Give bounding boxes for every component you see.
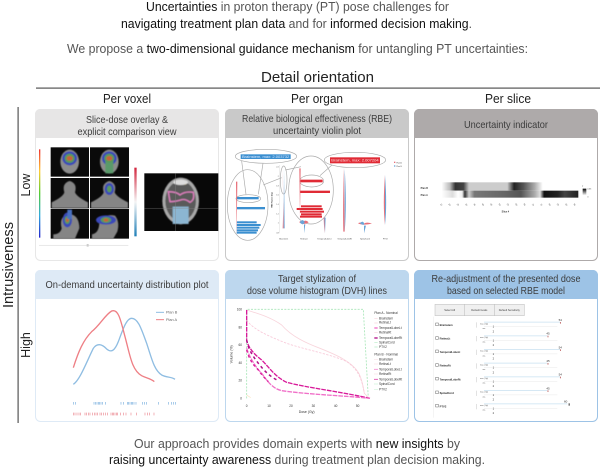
organ sliders: TemporalLobeRt bbox=[440, 377, 461, 381]
slice heatmap: 35 bbox=[472, 203, 476, 207]
row heading: High: High bbox=[19, 332, 33, 358]
comparison CT view bbox=[134, 168, 218, 236]
slice heatmap: Slice # bbox=[502, 212, 510, 214]
organ sliders: RetinaLt bbox=[440, 337, 450, 341]
DVH chart: 40 bbox=[334, 404, 338, 408]
DVH chart bbox=[230, 307, 402, 414]
organ sliders: 2 bbox=[493, 370, 495, 374]
organ sliders: unc. bbox=[482, 410, 486, 412]
control buttons bbox=[433, 304, 524, 418]
DVH legend: PTV2 bbox=[379, 345, 387, 349]
DVH chart: 0 bbox=[246, 404, 248, 408]
DVH legend: RetinaRt bbox=[379, 331, 391, 335]
CT slice grid with dose overlay bbox=[39, 147, 129, 247]
organ sliders: 2 bbox=[493, 329, 495, 333]
organ sliders: 1 bbox=[493, 366, 495, 370]
slice heatmap: Plan B bbox=[421, 188, 428, 190]
organ sliders: TemporalLobeLt bbox=[440, 350, 460, 354]
column heading: Per slice: Per slice bbox=[485, 92, 531, 106]
organ sliders: 45 bbox=[546, 386, 550, 390]
panel: DVH line stylization bbox=[225, 270, 409, 422]
slice heatmap: 85 bbox=[556, 203, 559, 207]
DVH chart: 30 bbox=[312, 404, 315, 408]
violin chart with callouts: Brainstem, max: 2.007204 bbox=[331, 159, 379, 163]
conclusion text bbox=[109, 437, 485, 467]
DVH chart: 100 bbox=[237, 307, 242, 311]
DVH chart: 50 bbox=[356, 404, 360, 408]
panel: on-demand distribution plot: On-demand uncertainty distribution plot bbox=[46, 279, 209, 291]
organ sliders: 1 bbox=[493, 393, 495, 397]
organ sliders: unc. bbox=[482, 396, 486, 398]
organ sliders: 54 bbox=[559, 345, 562, 349]
violin chart with callouts: 1.2 bbox=[276, 213, 279, 215]
violin chart with callouts: 1 bbox=[278, 223, 279, 225]
organ sliders: 54 bbox=[559, 318, 562, 322]
density curves and rug marks bbox=[73, 311, 178, 415]
DVH chart: 40 bbox=[238, 361, 242, 365]
panel: DVH line stylization: dose volume histogram (DVH) lines bbox=[247, 285, 387, 297]
organ sliders: 1 bbox=[493, 352, 495, 356]
DVH chart: 0 bbox=[240, 396, 242, 400]
DVH legend: SpinalCord bbox=[379, 340, 395, 344]
organ sliders: 2 bbox=[493, 343, 495, 347]
panel: on-demand distribution plot bbox=[35, 270, 219, 422]
column heading: Per organ: Per organ bbox=[291, 92, 343, 106]
slice heatmap: 15 bbox=[439, 203, 442, 207]
DVH chart: 10 bbox=[267, 404, 271, 408]
slice heatmap: 0 bbox=[587, 196, 589, 198]
organ sliders: RetinaRt bbox=[440, 364, 451, 368]
control buttons: Default Sensitivity bbox=[499, 308, 521, 312]
DVH legend: Brainstem bbox=[379, 358, 394, 362]
proposal text: We propose a two-dimensional guidance mechanism for untangling PT uncertainties: bbox=[67, 42, 528, 56]
DVH chart: 60 bbox=[238, 343, 242, 347]
organ sliders: unc. bbox=[482, 369, 486, 371]
panel: RBE violin plot bbox=[225, 109, 409, 260]
slice heatmap: Plan A bbox=[421, 194, 428, 197]
violin chart with callouts: 0.8 bbox=[276, 232, 279, 234]
violin chart with callouts: TemporalLobeRt bbox=[337, 237, 352, 240]
DVH chart: Volume (%) bbox=[230, 345, 234, 363]
DVH legend: Plan A - Nominal bbox=[374, 311, 398, 315]
organ sliders: SpinalCord bbox=[440, 391, 454, 395]
DVH legend: PTV2 bbox=[379, 387, 387, 391]
slice heatmap: 55 bbox=[506, 203, 509, 207]
violin chart with callouts: 1.4 bbox=[276, 204, 279, 206]
control buttons: Default Goals bbox=[471, 308, 488, 312]
violin chart with callouts: 1.6 bbox=[276, 195, 279, 197]
panel: RBE violin plot: uncertainty violin plot bbox=[273, 125, 361, 137]
violin chart with callouts: 2.2 bbox=[276, 167, 279, 169]
slice heatmap: 0.33 bbox=[587, 189, 592, 191]
conclusion text: raising uncertainty awareness during treatment plan decision making. bbox=[109, 453, 485, 467]
slice heatmap: 30 bbox=[464, 203, 467, 207]
violin chart with callouts: Brainstem bbox=[279, 237, 288, 240]
organ sliders: Brainstem bbox=[440, 323, 453, 327]
panel: slice-dose overlay: explicit comparison view bbox=[78, 126, 177, 138]
organ sliders: 60 bbox=[564, 400, 568, 404]
density curves and rug marks: Plan A bbox=[166, 318, 178, 322]
organ sliders: unc. bbox=[482, 355, 486, 357]
organ sliders: 1 bbox=[493, 406, 495, 410]
organ sliders: max. (Gy) bbox=[480, 364, 488, 366]
slice heatmap: 70 bbox=[531, 203, 534, 207]
slice heatmap: 20 bbox=[447, 203, 451, 207]
DVH legend: RetinaLt bbox=[379, 321, 391, 325]
DVH legend: RetinaRt bbox=[379, 372, 391, 376]
organ sliders: 45 bbox=[546, 359, 550, 363]
DVH legend: TemporalLobeRt bbox=[379, 336, 402, 340]
panel: RBE violin plot: Relative biological effectiveness (RBE) bbox=[242, 113, 392, 125]
organ sliders: 2 bbox=[493, 411, 495, 415]
panel: slice-dose overlay bbox=[35, 109, 219, 260]
organ sliders: 2 bbox=[493, 384, 495, 388]
violin chart with callouts: PTV2 bbox=[383, 238, 388, 240]
DVH legend: TemporalLobeLt bbox=[379, 326, 402, 330]
DVH legend: Plan B - Nominal bbox=[374, 353, 398, 357]
organ sliders: 1 bbox=[493, 338, 495, 342]
panel: DVH line stylization: Target stylization of bbox=[278, 273, 356, 285]
organ sliders: unc. bbox=[482, 328, 486, 330]
organ sliders: 1 bbox=[493, 325, 495, 329]
DVH chart: Dose (Gy) bbox=[299, 410, 315, 414]
organ sliders bbox=[436, 318, 570, 415]
slice heatmap: 65 bbox=[522, 203, 526, 207]
intro text: Uncertainties in proton therapy (PT) pose challenges for bbox=[146, 0, 449, 14]
control buttons: Select All bbox=[444, 308, 456, 312]
slice heatmap: 50 bbox=[497, 203, 501, 207]
violin chart with callouts: Plan A bbox=[396, 161, 402, 164]
organ sliders: PTV2 bbox=[440, 404, 447, 408]
organ sliders: 45 bbox=[546, 332, 550, 336]
violin chart with callouts: 2 bbox=[278, 176, 279, 178]
organ sliders: 2 bbox=[493, 357, 495, 361]
violin chart with callouts: RetinaLt bbox=[300, 237, 308, 240]
panel: re-adjustment of dose bbox=[414, 270, 598, 422]
slice heatmap: 90 bbox=[564, 203, 567, 207]
violin chart with callouts: Plan B bbox=[396, 166, 402, 168]
conclusion text: Our approach provides domain experts with new insights by bbox=[134, 437, 461, 451]
slice heatmap bbox=[421, 182, 592, 214]
slice heatmap: 80 bbox=[547, 203, 551, 207]
DVH legend: SpinalCord bbox=[379, 382, 395, 386]
organ sliders: max. (Gy) bbox=[480, 337, 488, 339]
panel: re-adjustment of dose: Re-adjustment of the presented dose bbox=[432, 273, 581, 285]
slice heatmap: 75 bbox=[539, 203, 542, 207]
organ sliders: max. (Gy) bbox=[480, 405, 488, 407]
organ sliders: unc. bbox=[482, 342, 486, 344]
violin chart with callouts: RBE Factor (Gy) bbox=[270, 192, 273, 208]
violin chart with callouts: 1.8 bbox=[276, 185, 279, 187]
slice heatmap: 40 bbox=[481, 203, 484, 207]
panel: slice-dose overlay: Slice-dose overlay & bbox=[86, 114, 168, 126]
DVH chart: 80 bbox=[238, 325, 242, 329]
DVH chart: 20 bbox=[289, 404, 293, 408]
slice heatmap: 95 bbox=[572, 203, 576, 207]
DVH legend: RetinaLt bbox=[379, 362, 391, 366]
organ sliders: 1 bbox=[493, 379, 495, 383]
slice heatmap: 25 bbox=[456, 203, 459, 207]
DVH legend: Brainstem bbox=[379, 316, 394, 320]
violin chart with callouts: Brainstem, max: 2.003732 bbox=[242, 155, 289, 159]
horizontal axis title: Detail orientation: Detail orientation bbox=[261, 70, 374, 86]
violin chart with callouts bbox=[227, 149, 402, 240]
DVH legend: TemporalLobeRt bbox=[379, 377, 402, 381]
DVH chart: 20 bbox=[238, 379, 242, 383]
slice heatmap: 45 bbox=[489, 203, 492, 207]
organ sliders: unc. bbox=[482, 383, 486, 385]
vertical axis title: Intrusiveness: Intrusiveness bbox=[1, 222, 17, 308]
organ sliders: max. (Gy) bbox=[480, 351, 488, 353]
panel: re-adjustment of dose: based on selected RBE model bbox=[447, 285, 565, 297]
panel: uncertainty indicator: Uncertainty indicator bbox=[464, 119, 548, 131]
panel: uncertainty indicator bbox=[414, 109, 598, 260]
violin chart with callouts: SpinalCord bbox=[360, 237, 370, 240]
organ sliders: max. (Gy) bbox=[480, 323, 488, 325]
density curves and rug marks: Plan B bbox=[166, 311, 178, 315]
organ sliders: 54 bbox=[559, 373, 562, 377]
row heading: Low: Low bbox=[19, 173, 33, 196]
organ sliders: 2 bbox=[493, 398, 495, 402]
violin chart with callouts: TemporalLobeLt bbox=[317, 237, 332, 240]
DVH legend bbox=[374, 311, 402, 391]
organ sliders: max. (Gy) bbox=[480, 378, 488, 380]
column heading: Per voxel: Per voxel bbox=[103, 92, 151, 106]
organ sliders: max. (Gy) bbox=[480, 392, 488, 394]
slice heatmap: σ bbox=[582, 186, 584, 188]
slice heatmap: 60 bbox=[514, 203, 517, 207]
intro text: navigating treatment plan data and for informed decision making. bbox=[121, 17, 472, 31]
intro text bbox=[121, 0, 472, 31]
DVH legend: TemporalLobeLt bbox=[379, 367, 402, 371]
